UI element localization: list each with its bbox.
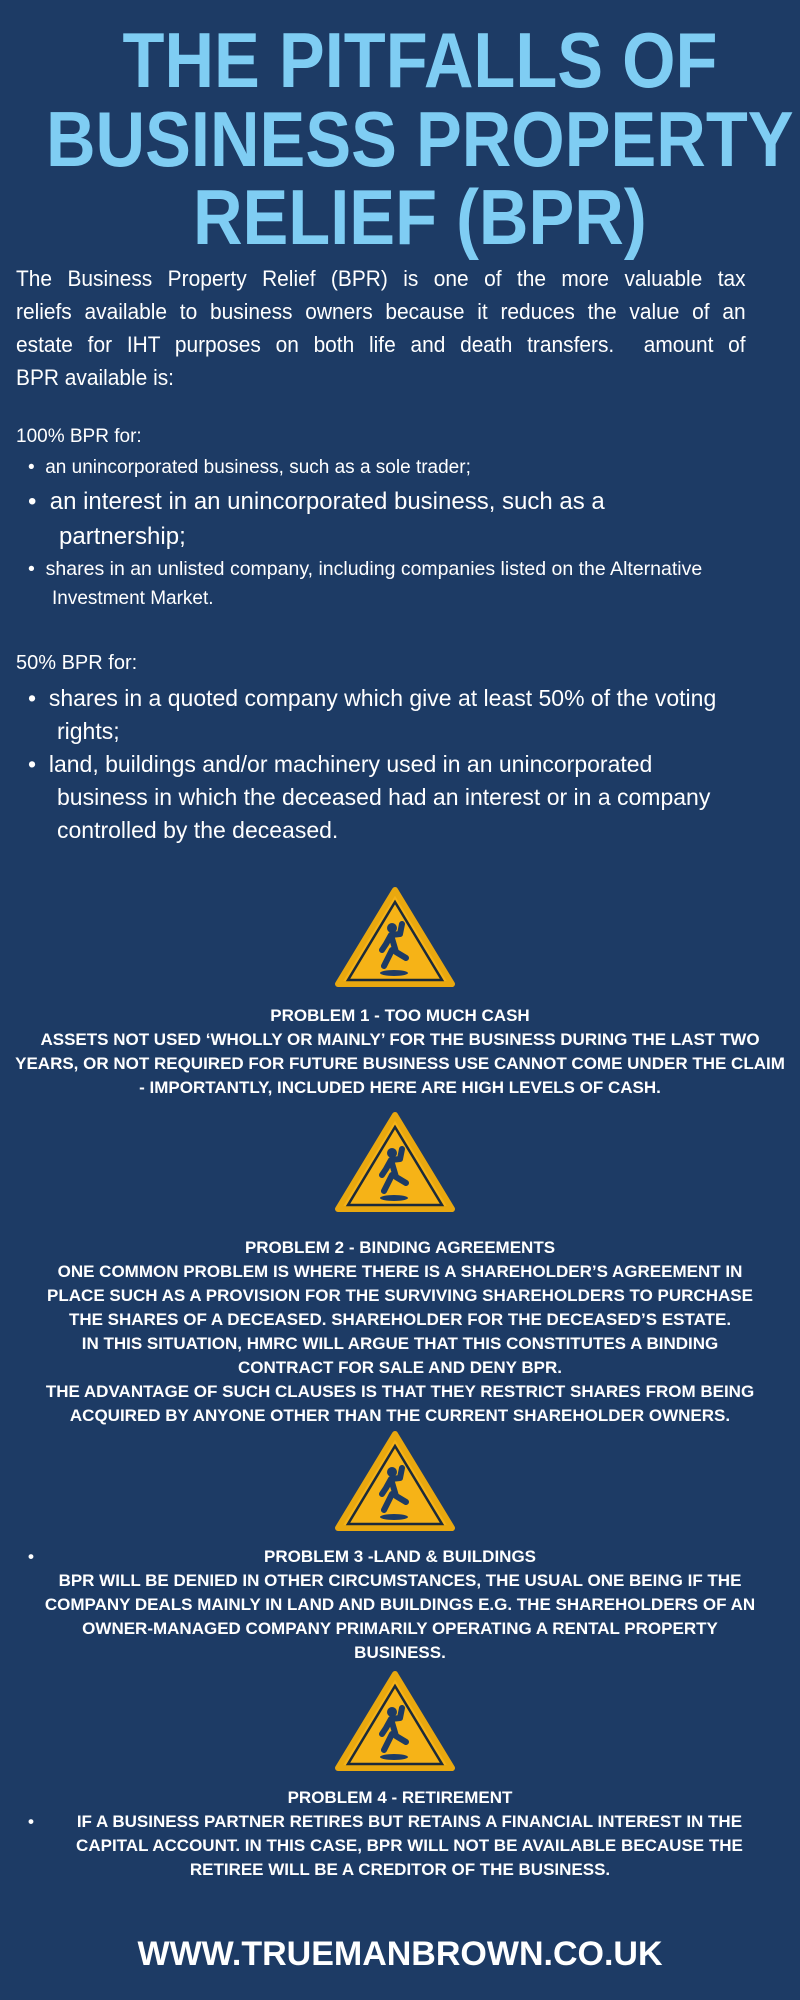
50% BPR list: controlled by the deceased. (57, 817, 338, 843)
footer website: WWW.TRUEMANBROWN.CO.UK (137, 1935, 663, 1973)
50% BPR list: business in which the deceased had an interest or in a company (57, 784, 710, 810)
title: BUSINESS PROPERTY (46, 95, 794, 183)
intro paragraph: The Business Property Relief (BPR) is one of the more valuable tax (16, 266, 746, 291)
problem 3 text: PROBLEM 3 -LAND & BUILDINGS (264, 1547, 536, 1566)
problem 2 text: IN THIS SITUATION, HMRC WILL ARGUE THAT THIS CONSTITUTES A BINDING (82, 1334, 718, 1353)
problem 2 text: THE ADVANTAGE OF SUCH CLAUSES IS THAT THEY RESTRICT SHARES FROM BEING (46, 1382, 754, 1401)
problem 3 text: BPR WILL BE DENIED IN OTHER CIRCUMSTANCES, THE USUAL ONE BEING IF THE (59, 1571, 741, 1590)
problem 4 text: PROBLEM 4 - RETIREMENT (288, 1788, 512, 1807)
problem 1 text: ASSETS NOT USED ‘WHOLLY OR MAINLY’ FOR THE BUSINESS DURING THE LAST TWO (40, 1030, 760, 1049)
title: RELIEF (BPR) (193, 173, 647, 261)
problem 1 text: PROBLEM 1 - TOO MUCH CASH (270, 1006, 530, 1025)
problem 2 text: PLACE SUCH AS A PROVISION FOR THE SURVIVING SHAREHOLDERS TO PURCHASE (47, 1286, 753, 1305)
problem 3 text (28, 1547, 755, 1662)
100% BPR list: partnership; (59, 523, 186, 550)
intro paragraph: estate for IHT purposes on both life and death transfers. amount of (16, 332, 746, 357)
50% BPR list: • shares in a quoted company which give at least 50% of the voting (28, 685, 716, 711)
problem 1 text: YEARS, OR NOT REQUIRED FOR FUTURE BUSINESS USE CANNOT COME UNDER THE CLAIM (15, 1054, 785, 1073)
intro paragraph (16, 266, 746, 390)
50% BPR list (16, 652, 716, 843)
icon: warning 2 (335, 1112, 455, 1212)
100% BPR list: • an interest in an unincorporated business, such as a (28, 488, 605, 515)
problem 2 text: ACQUIRED BY ANYONE OTHER THAN THE CURRENT SHAREHOLDER OWNERS. (70, 1406, 730, 1425)
icon: warning 3 (335, 1431, 455, 1531)
100% BPR list: Investment Market. (52, 588, 214, 609)
problem 1 text (15, 1006, 785, 1097)
problem 2 text: CONTRACT FOR SALE AND DENY BPR. (238, 1358, 562, 1377)
problem 2 text: ONE COMMON PROBLEM IS WHERE THERE IS A SHAREHOLDER’S AGREEMENT IN (58, 1262, 742, 1281)
50% BPR list: rights; (57, 718, 120, 744)
problem 3 text: • (28, 1547, 34, 1566)
100% BPR list: 100% BPR for: (16, 426, 142, 447)
100% BPR list (16, 426, 702, 609)
icon: warning 4 (335, 1671, 455, 1771)
problem 4 text: IF A BUSINESS PARTNER RETIRES BUT RETAINS A FINANCIAL INTEREST IN THE (77, 1812, 742, 1831)
problem 2 text: PROBLEM 2 - BINDING AGREEMENTS (245, 1238, 555, 1257)
problem 2 text (46, 1238, 754, 1425)
100% BPR list: • shares in an unlisted company, including companies listed on the Alternative (28, 558, 702, 580)
100% BPR list: • an unincorporated business, such as a sole trader; (28, 457, 471, 478)
problem 3 text: BUSINESS. (354, 1643, 446, 1662)
problem 4 text: • (28, 1812, 34, 1831)
50% BPR list: • land, buildings and/or machinery used in an unincorporated (28, 751, 652, 777)
intro paragraph: BPR available is: (16, 365, 174, 390)
icon: warning 1 (335, 887, 455, 987)
problem 4 text (28, 1788, 743, 1879)
title: THE PITFALLS OF (123, 16, 717, 104)
problem 3 text: COMPANY DEALS MAINLY IN LAND AND BUILDINGS E.G. THE SHAREHOLDERS OF AN (45, 1595, 755, 1614)
intro paragraph: reliefs available to business owners because it reduces the value of an (16, 299, 746, 324)
problem 2 text: THE SHARES OF A DECEASED. SHAREHOLDER FOR THE DECEASED’S ESTATE. (69, 1310, 731, 1329)
problem 4 text: CAPITAL ACCOUNT. IN THIS CASE, BPR WILL NOT BE AVAILABLE BECAUSE THE (76, 1836, 743, 1855)
problem 1 text: - IMPORTANTLY, INCLUDED HERE ARE HIGH LEVELS OF CASH. (139, 1078, 661, 1097)
title (46, 16, 794, 261)
50% BPR list: 50% BPR for: (16, 652, 137, 674)
problem 3 text: OWNER-MANAGED COMPANY PRIMARILY OPERATING A RENTAL PROPERTY (82, 1619, 718, 1638)
problem 4 text: RETIREE WILL BE A CREDITOR OF THE BUSINESS. (190, 1860, 610, 1879)
